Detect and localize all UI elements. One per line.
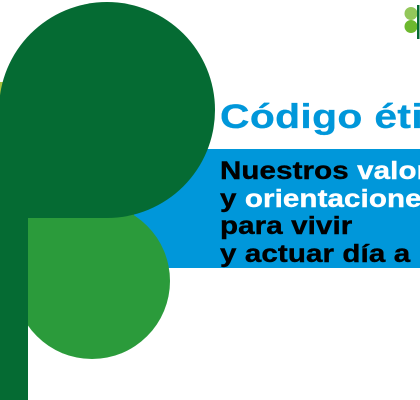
olive leaf sliver [0,82,4,97]
blue banner [130,149,420,268]
subtitle text [220,157,420,268]
light green circle [14,203,170,359]
icon: clover logo [404,5,420,39]
subtitle text: para vivir [220,212,352,240]
dark green circle and stem [0,2,215,400]
